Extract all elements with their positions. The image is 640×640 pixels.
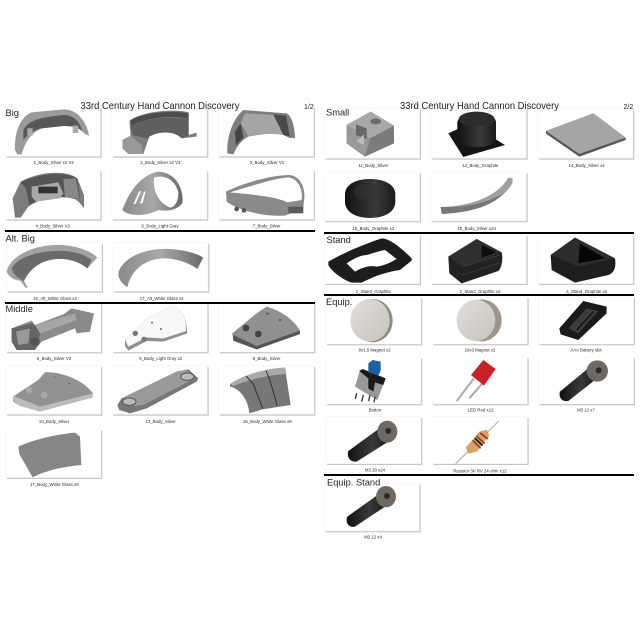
heading: Small: Small — [326, 108, 349, 118]
card: 4_Body_Silver: 4_Body_Silver V2 — [35, 223, 70, 228]
card: 1_Body_Silver: 1_Body_Silver x2 V2 — [34, 160, 74, 165]
card: 17_Alt_White Glass — [113, 243, 209, 301]
card: 7_Body_Silver — [218, 170, 315, 228]
card: 10_Body_Silver: 10_Body_Silver — [39, 419, 70, 424]
card: 12_Body_Graphite: 12_Body_Graphite — [462, 163, 499, 168]
card: 3_Body_Silver: 3_Body_Silver V2 — [250, 160, 285, 165]
card: 17_Body_White Glass: 17_Body_White Glass x8 — [30, 482, 79, 487]
page 2 of the parts sheet — [324, 108, 635, 539]
heading: Alt. Big: Alt. Big — [6, 234, 35, 244]
card: 6_Body_Light Gray: 6_Body_Light Gray — [141, 223, 179, 228]
card: 10_Body_Silver — [6, 366, 102, 424]
card: 12_Body_Graphite — [431, 108, 528, 168]
card: M3 12 x7: M3 12 x7 — [577, 407, 595, 412]
card: 13_Body_Silver: 13_Body_Silver — [145, 419, 176, 424]
card: 5_Body_Silver: 5_Body_Silver V2 — [37, 356, 72, 361]
card: M3 20: M3 20 x24 — [365, 468, 386, 473]
card: 2_Body_Silver — [112, 107, 208, 165]
panel: middle parts — [6, 303, 315, 487]
card: 1_Stand_Graphite — [324, 235, 421, 294]
card: 11_Body_Silver: 11_Body_Silver — [358, 163, 389, 168]
card: 8x1.5 Magnet: 8x1.5 Magnet x2 — [359, 347, 391, 352]
card: 13_Body_Silver — [112, 366, 209, 424]
card: 1_Body_Silver — [5, 107, 102, 165]
card: 16_Alt_White Glass: 16_Alt_White Glass x2 — [33, 296, 77, 301]
card: 2_Stand_Graphite: 2_Stand_Graphite x2 — [460, 289, 501, 294]
card: AAA Battery slot: AAA Battery slot — [570, 347, 602, 352]
page 1 of the parts sheet — [5, 107, 315, 487]
page number 1/2: 1/2 — [304, 104, 314, 111]
card: Button — [326, 357, 422, 412]
card: 11_Body_Silver — [324, 108, 421, 168]
card: M3 12 x4 — [325, 483, 421, 539]
panel: equipment — [325, 297, 635, 539]
card: 9_Body_Silver: 9_Body_Silver — [253, 356, 281, 361]
card: Resistor: Resistor 3V RV 24 ohm x12 — [453, 468, 507, 473]
heading: Equip.: Equip. — [326, 297, 352, 307]
heading: Big: Big — [6, 108, 19, 118]
title: page 1: 33rd Century Hand Cannon Discovery — [80, 100, 240, 112]
card: 2_Body_Silver: 2_Body_Silver x2 V3 — [140, 160, 181, 165]
card: 10x3 Magnet — [432, 297, 529, 352]
card: AAA Battery slot — [538, 297, 635, 352]
page number 2/2: 2/2 — [624, 104, 633, 111]
panel: big parts — [5, 107, 315, 301]
heading: Middle: Middle — [6, 304, 33, 314]
card: M3 12 x7 — [538, 357, 635, 412]
card: 4_Body_Silver — [5, 170, 102, 228]
card: 17_Body_White Glass — [6, 429, 102, 487]
heading: Stand: Stand — [326, 235, 351, 245]
card: Button: Button — [369, 407, 382, 412]
card: 9_Body_Silver — [219, 303, 315, 361]
card: 3_Stand_Graphite: 3_Stand_Graphite x2 — [566, 289, 608, 294]
card: 16_Alt_White Glass — [6, 243, 103, 301]
card: 17_Alt_White Glass: 17_Alt_White Glass x2 — [140, 296, 184, 301]
card: 8_Body_Light Gray: 8_Body_Light Gray x2 — [139, 356, 183, 361]
card: M3 12 x4: M3 12 x4 — [364, 534, 382, 539]
card: 2_Stand_Graphite — [431, 235, 528, 294]
card: 5_Body_Silver — [6, 303, 102, 361]
card: 18_Body_Silver: 18_Body_Silver x24 — [457, 226, 496, 231]
panel: small parts — [324, 108, 634, 294]
card: 7_Body_Silver: 7_Body_Silver — [253, 223, 281, 228]
card: 15_Body_Graphite — [324, 172, 421, 231]
card: 3_Stand_Graphite — [538, 235, 634, 294]
card: 18_Body_Silver — [431, 172, 528, 231]
card: 6_Body_Light Gray — [112, 170, 208, 228]
card: LED Red — [432, 357, 529, 412]
card: 8_Body_Light Gray — [112, 303, 209, 361]
card: 14_Body_Silver — [538, 108, 634, 168]
card: M3 20 — [326, 417, 422, 473]
card: 16_Body_White Glass — [219, 366, 315, 424]
title: page 2: 33rd Century Hand Cannon Discovery — [400, 100, 560, 112]
card: 15_Body_Graphite: 15_Body_Graphite x2 — [352, 226, 395, 231]
card: 16_Body_White Glass: 16_Body_White Glass x8 — [243, 419, 292, 424]
card: LED Red: LED Red x12 — [468, 407, 494, 412]
heading: Equip. Stand: Equip. Stand — [327, 478, 380, 488]
card: 14_Body_Silver: 14_Body_Silver x4 — [569, 163, 605, 168]
card: 1_Stand_Graphite: 1_Stand_Graphite — [356, 289, 391, 294]
card: Resistor — [432, 417, 529, 473]
card: 10x3 Magnet: 10x3 Magnet x2 — [465, 347, 496, 352]
card: 3_Body_Silver — [218, 107, 315, 165]
card: 8x1.5 Magnet — [326, 297, 422, 352]
